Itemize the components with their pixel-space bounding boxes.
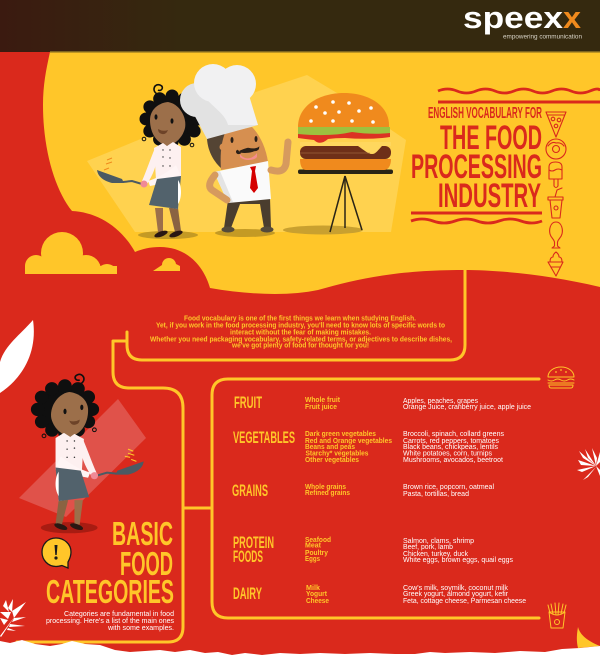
table: fruit row: [234, 393, 531, 412]
intro text: Whether you need packaging vocabulary, safety-related terms, or adjectives to describe dishes,: [150, 334, 452, 344]
table: vegetables row: Broccoli, spinach, collard greens: [403, 431, 504, 438]
section heading: basic food categories: FOOD: [120, 545, 173, 582]
table: fruit row: FRUIT: [234, 393, 262, 412]
intro text: Yet, if you work in the food processing industry, you'll need to know lots of specific words to: [156, 320, 445, 330]
section description: [46, 609, 174, 632]
table: protein foods row: Salmon, clams, shrimp: [403, 538, 474, 545]
table: dairy row: Feta, cottage cheese, Parmesan cheese: [403, 598, 526, 605]
table: protein foods row: White eggs, brown eggs, quail eggs: [403, 557, 513, 564]
table: protein foods row: PROTEIN: [233, 533, 274, 552]
table: dairy row: Milk: [306, 585, 320, 592]
icon: popsicle: [549, 162, 562, 188]
section description: Categories are fundamental in food: [64, 609, 174, 618]
table: vegetables row: White potatoes, corn, turnips: [403, 450, 492, 458]
table: dairy row: DAIRY: [233, 584, 262, 603]
table: vegetables row: [233, 428, 504, 464]
intro text: interact without the fear of making mistakes.: [230, 328, 371, 336]
logo: empowering communication: [503, 34, 582, 40]
table: protein foods row: FOODS: [233, 547, 263, 566]
torn white paper edge: [0, 640, 600, 667]
header bar: [0, 0, 600, 52]
table: protein foods row: Eggs: [305, 556, 320, 563]
table: protein foods row: Meat: [305, 542, 322, 550]
stand: [330, 176, 362, 232]
table: protein foods row: [233, 533, 513, 566]
male chef: [180, 64, 288, 237]
table: grains row: [232, 481, 494, 500]
table: vegetables row: Red and Orange vegetables: [305, 438, 392, 445]
table: dairy row: Cheese: [306, 598, 329, 605]
section description: processing. Here's a list of the main ones: [46, 616, 174, 625]
icon: fries outline: [548, 603, 566, 628]
section description: with some examples.: [107, 623, 174, 632]
section heading: basic food categories: [46, 515, 174, 610]
right white leaf: [577, 448, 600, 480]
woman chef with pan, facing right: [37, 374, 144, 533]
left white leaf: [0, 599, 26, 637]
table: vegetables row: Dark green vegetables: [305, 431, 376, 438]
intro text: [150, 314, 452, 350]
pale polygon behind second chef: [19, 399, 146, 517]
table: vegetables row: Black beans, chickpeas, lentils: [403, 444, 499, 451]
table: protein foods row: Beef, pork, lamb: [403, 544, 453, 551]
table: grains row: Whole grains: [305, 484, 346, 491]
table: vegetables row: Starchy* vegetables: [306, 450, 369, 458]
table: protein foods row: Poultry: [305, 550, 328, 557]
woman chef holding pan: [97, 85, 199, 239]
table: fruit row: Fruit juice: [305, 404, 337, 411]
table: grains row: Brown rice, popcorn, oatmeal: [403, 484, 494, 491]
icon: drink cup: [548, 188, 563, 218]
table: protein foods row: Chicken, turkey, duck: [403, 551, 468, 558]
table: dairy row: Greek yogurt, almond yogurt, kefir: [403, 591, 509, 598]
table: vegetables row: Other vegetables: [305, 457, 359, 464]
logo: speex: [463, 0, 564, 35]
table: dairy row: Cow's milk, soymilk, coconut milk: [403, 585, 509, 592]
table: grains row: Pasta, tortillas, bread: [403, 491, 469, 498]
yellow corner triangle: [577, 627, 600, 648]
section heading: basic food categories: BASIC: [112, 515, 173, 552]
top-left white leaf: [0, 320, 34, 393]
table: protein foods row: Seafood: [305, 537, 331, 544]
logo: [463, 0, 582, 40]
table: vegetables row: Mushrooms, avocados, beetroot: [403, 457, 503, 464]
table: grains row: GRAINS: [232, 481, 268, 500]
title block: [411, 89, 600, 223]
table: dairy row: Yogurt: [306, 591, 328, 598]
table: fruit row: Orange Juice, cranberry juice, apple juice: [403, 404, 531, 411]
intro text: Food vocabulary is one of the first things we learn when studying English.: [184, 314, 416, 322]
logo: x: [563, 0, 582, 35]
table: grains row: Refined grains: [305, 490, 350, 497]
table: fruit row: Apples, peaches, grapes: [403, 398, 478, 405]
pale spotlight polygon: [87, 75, 406, 232]
icon column: food line icons: [546, 112, 566, 276]
table: vegetables row: Carrots, red peppers, tomatoes: [403, 438, 499, 445]
chef hat: [180, 64, 258, 139]
small cloud: [153, 258, 180, 272]
connector lines: [17, 270, 539, 642]
icon: pizza: [546, 112, 566, 137]
icon: donut: [546, 139, 566, 159]
table: fruit row: Whole fruit: [305, 397, 341, 404]
table: vegetables row: Beans and peas: [305, 444, 355, 451]
table: vegetables row: VEGETABLES: [233, 428, 295, 447]
table: dairy row: [233, 584, 526, 605]
yellow hero background: [43, 52, 600, 294]
intro text: we've got plenty of food for thought for you!: [231, 340, 369, 350]
icon: ice cream cone: [548, 252, 563, 276]
big cloud: [25, 232, 117, 274]
icon: drumstick: [550, 222, 562, 248]
burger on stand: [283, 93, 393, 234]
icon: speech bubble with exclamation: [42, 538, 71, 568]
section heading: basic food categories: CATEGORIES: [46, 573, 174, 610]
icon: burger outline: [548, 367, 574, 388]
